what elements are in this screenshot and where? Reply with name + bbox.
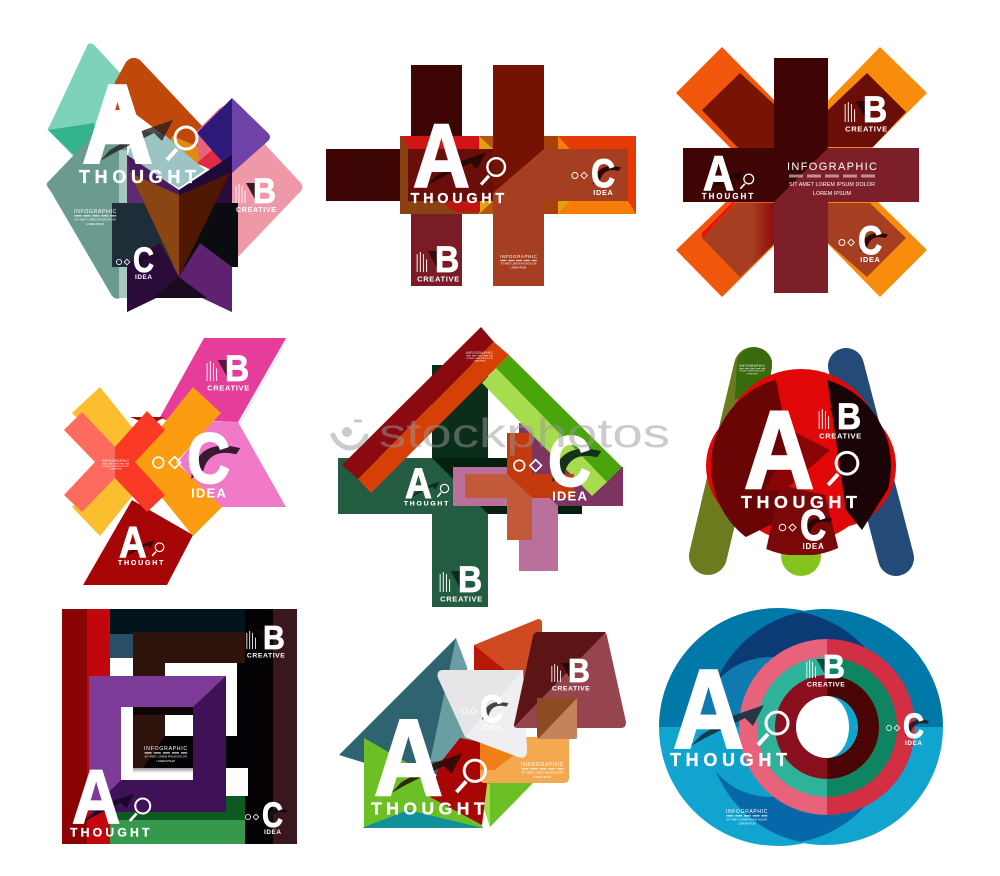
label B creative: CREATIVE: [236, 205, 276, 214]
horizontal band frame: [400, 136, 636, 214]
infographic caption: LOREM IPSUM: [86, 223, 104, 226]
label B creative: [807, 649, 845, 689]
label B creative: CREATIVE: [845, 124, 887, 133]
folded bow shape: [127, 155, 232, 312]
purple diamond: [197, 98, 270, 173]
infographic caption: LOREM IPSUM: [533, 776, 551, 779]
infographic caption: LOREM IPSUM: [738, 823, 755, 825]
label B creative: B: [823, 649, 845, 686]
olive pill: [708, 347, 772, 556]
label B creative: CREATIVE: [552, 686, 590, 693]
central cross: [683, 58, 919, 293]
label A thought: A: [413, 106, 470, 206]
folded bow lower pieces: [127, 173, 232, 312]
red chevron: [115, 411, 165, 512]
label B creative: [845, 89, 887, 133]
dark inner squares: [702, 73, 906, 277]
label B creative: [207, 348, 249, 392]
label B creative: B: [263, 620, 285, 657]
label A thought: THOUGHT: [670, 750, 787, 770]
infographic caption: SIT AMET LOREM IPSUM DOLOR: [726, 818, 767, 821]
infographic caption: INFOGRAPHIC: [739, 364, 766, 368]
coral chevron: [64, 412, 115, 512]
label A thought: A: [703, 146, 734, 201]
label B creative: [236, 172, 276, 214]
white inner opening: [121, 707, 193, 780]
infographic caption: INFOGRAPHIC: [726, 809, 768, 815]
label C idea: [779, 501, 832, 551]
overlap lens: [707, 612, 897, 842]
infographic caption: SIT AMET LOREM IPSUM DOLOR: [466, 357, 494, 360]
label C idea: [245, 796, 288, 836]
label B creative: B: [435, 239, 459, 280]
watermark: stockphotos: [379, 410, 670, 456]
label B creative: CREATIVE: [440, 594, 482, 603]
watermark: [333, 410, 670, 456]
yellow chevron: [72, 387, 160, 536]
infographic caption: INFOGRAPHIC: [144, 746, 187, 752]
infographic caption: [787, 161, 877, 197]
light gray panel: [438, 670, 527, 758]
orange rounded panel: [480, 737, 569, 783]
label A thought: THOUGHT: [741, 492, 857, 512]
infographic caption: SIT AMET LOREM IPSUM DOLOR: [144, 755, 187, 759]
label A thought: A: [82, 62, 153, 187]
label B creative: B: [568, 653, 590, 690]
infographic caption: [500, 254, 538, 269]
label C idea: [462, 688, 509, 732]
label C idea: IDEA: [552, 488, 587, 503]
label B creative: CREATIVE: [207, 383, 249, 392]
infographic caption: SIT AMET LOREM IPSUM DOLOR: [789, 182, 875, 188]
outer right circle: [707, 609, 943, 845]
infographic caption: [102, 459, 130, 470]
dark rectangle: [112, 203, 238, 267]
label C idea: [514, 422, 601, 503]
green roof arm: [482, 355, 622, 496]
label A thought: THOUGHT: [70, 826, 150, 840]
label B creative: [819, 396, 861, 440]
label A thought: A: [744, 389, 814, 512]
infographic caption: [74, 209, 117, 226]
label A thought: A: [405, 460, 432, 508]
label C idea: IDEA: [191, 485, 226, 500]
label C idea: C: [903, 707, 924, 746]
infographic caption: [739, 364, 766, 375]
infographic caption: SIT AMET LOREM IPSUM DOLOR: [521, 772, 563, 775]
mint diamond: [48, 43, 122, 158]
inner blue circle: [700, 657, 840, 797]
pink trapezoid: [178, 422, 286, 507]
label A thought: [702, 146, 754, 201]
label C idea: C: [858, 218, 882, 263]
label C idea: [116, 241, 159, 281]
magenta parallelogram: [160, 338, 288, 424]
infographic caption: LOREM IPSUM: [156, 759, 175, 763]
label C idea: C: [548, 422, 591, 502]
center hole: [796, 696, 858, 758]
infographic caption: INFOGRAPHIC: [787, 161, 877, 173]
label B creative: CREATIVE: [417, 274, 459, 283]
infographic caption: INFOGRAPHIC: [466, 351, 494, 355]
infographic caption: INFOGRAPHIC: [74, 209, 117, 215]
label A thought: THOUGHT: [118, 560, 164, 567]
label A thought: A: [374, 698, 443, 819]
infographic caption: SIT AMET LOREM IPSUM DOLOR: [102, 465, 130, 468]
infographic caption: LOREM IPSUM: [747, 373, 758, 375]
label A thought: [741, 389, 858, 512]
label A thought: THOUGHT: [371, 798, 485, 818]
label C idea: IDEA: [482, 725, 501, 732]
panel: polygon collage: [339, 619, 626, 828]
square base strips: [62, 609, 297, 844]
infographic caption: SIT AMET LOREM IPSUM DOLOR: [500, 263, 537, 266]
infographic caption: LOREM IPSUM: [813, 191, 852, 197]
infographic caption: LOREM IPSUM: [474, 361, 486, 363]
blue pill: [846, 366, 896, 558]
label B creative: CREATIVE: [807, 682, 845, 689]
panel: plus sign cross: [326, 65, 636, 286]
label C idea: C: [133, 241, 154, 280]
infographic caption: [521, 762, 564, 779]
label C idea: IDEA: [593, 188, 614, 197]
infographic caption: SIT AMET LOREM IPSUM DOLOR: [739, 370, 766, 373]
label B creative: B: [863, 89, 887, 130]
maroon trapezoid: [514, 632, 626, 728]
label A thought: A: [72, 755, 120, 840]
infographic caption: SIT AMET LOREM IPSUM DOLOR: [74, 219, 116, 222]
label A thought: [404, 460, 449, 508]
left horizontal bar: [326, 149, 402, 201]
pink cross: [453, 423, 623, 571]
label C idea: C: [187, 419, 230, 499]
label C idea: [153, 419, 240, 500]
right vertical bar: [493, 65, 628, 286]
dark red parallelogram: [83, 417, 193, 585]
label C idea: IDEA: [264, 829, 281, 836]
label A thought: [670, 647, 788, 772]
label B creative: [247, 620, 285, 660]
green triangle base: [362, 738, 533, 828]
label B creative: CREATIVE: [819, 431, 861, 440]
green cross: [338, 365, 582, 607]
label C idea: IDEA: [135, 274, 152, 281]
label C idea: IDEA: [802, 542, 824, 551]
label A thought: THOUGHT: [702, 192, 753, 201]
infographic caption: INFOGRAPHIC: [500, 254, 538, 259]
label C idea: C: [800, 501, 826, 550]
red circle blob: [706, 369, 896, 542]
label A thought: THOUGHT: [79, 167, 196, 187]
label C idea: IDEA: [860, 255, 881, 264]
dark red shard: [430, 738, 490, 825]
panel: house arrow: [338, 327, 623, 607]
panel: letter A with circles: [700, 347, 900, 576]
panel: X with parallelograms: [64, 338, 288, 585]
label B creative: B: [253, 172, 276, 211]
panel: asterisk: [676, 47, 927, 297]
label C idea: [886, 707, 929, 747]
diagonal orange arms: [676, 47, 927, 297]
outer left circle: [659, 608, 897, 846]
label B creative: [417, 239, 459, 283]
infographic caption: [466, 351, 494, 362]
infographic caption: INFOGRAPHIC: [521, 762, 564, 768]
left vertical bar: [411, 65, 462, 286]
label B creative: [440, 559, 482, 603]
lime pill: [781, 536, 821, 576]
label A thought: [70, 755, 150, 840]
label A thought: THOUGHT: [411, 191, 504, 207]
label A thought: [118, 518, 164, 567]
label B creative: [552, 653, 590, 693]
label A thought: [79, 62, 197, 187]
label B creative: CREATIVE: [247, 653, 285, 660]
orange chevron: [133, 387, 222, 536]
purple frame: [89, 676, 226, 812]
label C idea: C: [591, 151, 615, 196]
brown and black layers: [110, 632, 248, 796]
red roof arm: [342, 327, 509, 493]
panel: diamond cluster: [47, 43, 302, 312]
pink diamond: [196, 106, 302, 262]
infographic caption: [726, 809, 768, 826]
label B creative: B: [837, 396, 861, 437]
teal triangle: [339, 638, 480, 775]
orange cross: [465, 433, 574, 540]
brown square: [537, 698, 577, 739]
label A thought: THOUGHT: [404, 501, 449, 508]
label C idea: [839, 218, 888, 264]
pink ring: [739, 639, 915, 815]
label A thought: A: [119, 518, 147, 567]
orange diamond: [110, 58, 207, 165]
infographic caption: LOREM IPSUM: [110, 469, 122, 471]
infographic caption: LOREM IPSUM: [511, 267, 526, 269]
infographic caption: [144, 746, 187, 763]
slate diamond: [47, 136, 127, 299]
dark red ring: [775, 675, 879, 779]
label C idea: [572, 151, 621, 197]
dark overlays: [711, 380, 891, 555]
green ring: [757, 657, 897, 797]
panel: nested squares: [62, 609, 297, 844]
infographic caption: INFOGRAPHIC: [102, 459, 130, 463]
label C idea: C: [262, 796, 283, 835]
label C idea: IDEA: [905, 740, 922, 747]
label B creative: B: [458, 559, 482, 600]
label A thought: A: [673, 647, 744, 772]
green bars: [110, 796, 245, 844]
label A thought: [371, 698, 486, 819]
panel: concentric circles: [659, 608, 943, 846]
red orange shape: [474, 619, 542, 680]
label B creative: B: [225, 348, 249, 389]
label A thought: [411, 106, 505, 207]
pale teal wedge: [127, 130, 205, 188]
label C idea: C: [480, 688, 503, 731]
